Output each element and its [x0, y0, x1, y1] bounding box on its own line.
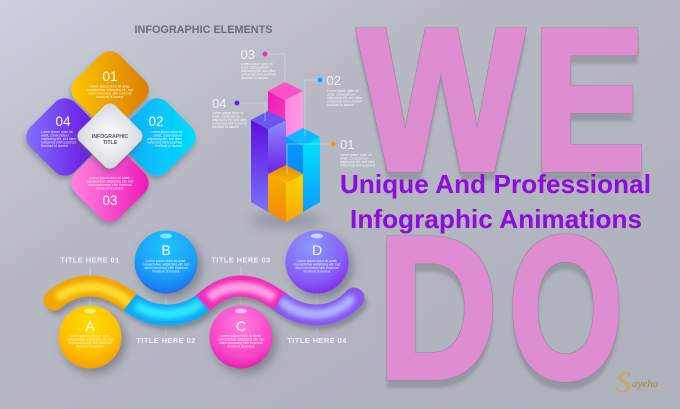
diamond infographic: [20, 45, 202, 228]
callout 04: nonummy nibh euismod: [212, 122, 247, 126]
title labels: TITLE HERE 04: [287, 336, 347, 345]
callout 02: [305, 73, 362, 136]
centre diamond: infographic title: TITLE: [103, 140, 118, 146]
sphere D: D: [312, 242, 322, 258]
sphere A: [58, 306, 122, 368]
subtitle line 1: Unique And Professional: [340, 169, 651, 199]
heading: INFOGRAPHIC ELEMENTS: [134, 24, 272, 36]
sphere B: Lorem ipsum dolor sit amet,: [146, 259, 186, 263]
callout 02: Lorem ipsum dolor sit: [327, 89, 359, 93]
sphere B: B: [161, 242, 171, 258]
callout 01: nonummy nibh euismod: [340, 164, 375, 168]
sphere D: diam nonummy nibh euismod: [295, 266, 339, 270]
callout 03: 03: [240, 47, 255, 62]
callout 02: nonummy nibh euismod: [327, 100, 362, 104]
callout 03: amet, consectetuer: [241, 66, 270, 70]
centre diamond: infographic title: [74, 100, 146, 172]
isometric bar chart: [212, 47, 375, 226]
sphere D: Lorem ipsum dolor sit amet,: [297, 259, 337, 263]
diamond 02: nonummy nibh euismod: [147, 140, 182, 144]
wave timeline: [54, 230, 357, 368]
sphere A: A: [85, 318, 95, 334]
diamond 01: Lorem ipsum dolor sit amet,: [90, 84, 130, 88]
callout 02: adipiscing elit, sed diam: [327, 96, 362, 100]
diamond 01: [65, 45, 155, 135]
diamond 03: [65, 138, 155, 228]
pink segment: [203, 286, 279, 303]
orange bar 01: [268, 165, 303, 222]
callout 03: [240, 47, 285, 84]
large headline WE DO: [358, 0, 646, 409]
purple segment: [279, 298, 354, 315]
diamond 03: consectetuer adipiscing elit, sed: [87, 180, 134, 184]
diamond 01: diam nonummy nibh euismod: [88, 92, 132, 96]
callout 04: 04: [212, 96, 226, 111]
purple subtitle: [340, 169, 651, 234]
centre diamond: infographic title: INFOGRAPHIC: [92, 134, 128, 140]
diamond 04: nonummy nibh euismod: [41, 140, 76, 144]
sphere B: tincidunt ut laoreet: [153, 270, 180, 274]
sphere C: diam nonummy nibh euismod: [219, 341, 263, 345]
diamond 03: Lorem ipsum dolor sit amet,: [90, 176, 130, 180]
diamond 04: tincidunt ut laoreet: [41, 144, 68, 148]
diamond 04: adipiscing elit, sed diam: [41, 137, 76, 141]
diamond 01: 01: [102, 69, 118, 84]
pink bar 03: [268, 82, 303, 138]
diamond 01: consectetuer adipiscing elit, sed: [87, 88, 134, 92]
blue segment: [130, 301, 205, 315]
orange segment: [54, 286, 132, 303]
sphere C: consectetuer adipiscing elit, sed: [218, 338, 265, 342]
sphere B: diam nonummy nibh euismod: [144, 266, 188, 270]
diamond 02: [112, 92, 202, 182]
title labels: TITLE HERE 03: [211, 256, 271, 264]
blue bar 02: [286, 128, 320, 212]
connector lines: [90, 267, 317, 333]
callout 04: adipiscing elit, sed diam: [212, 118, 247, 122]
callout 03: nonummy nibh euismod: [241, 72, 276, 76]
diamond 02: adipiscing elit, sed diam: [147, 137, 182, 141]
callout 04: amet, consectetuer: [212, 114, 241, 118]
diamond 02: 02: [148, 114, 164, 129]
callout 03: tincidunt ut laoreet: [241, 76, 268, 80]
diamond 02: amet, consectetuer: [154, 134, 183, 138]
sphere C: [210, 306, 272, 368]
wave tube shadow: [57, 291, 357, 320]
sphere C: C: [236, 318, 246, 334]
subtitle line 2: Infographic Animations: [350, 204, 642, 234]
diamond 03: 03: [102, 193, 118, 208]
callout 01: [287, 137, 375, 175]
sphere A: diam nonummy nibh euismod: [68, 341, 112, 345]
callout 03: adipiscing elit, sed diam: [241, 69, 276, 73]
callout 01: Lorem ipsum dolor sit: [340, 153, 372, 157]
diamond 04: 04: [55, 114, 71, 129]
signature: ayeha: [632, 378, 659, 390]
callout 01: 01: [340, 137, 354, 152]
diamond 02: Lorem ipsum dolor sit: [150, 130, 182, 134]
callout 04: Lorem ipsum dolor sit: [212, 111, 244, 115]
sphere C: tincidunt ut laoreet: [228, 344, 255, 348]
callout 03: Lorem ipsum dolor sit: [241, 62, 273, 66]
callout 02: 02: [326, 73, 341, 88]
sphere A: tincidunt ut laoreet: [77, 344, 104, 348]
sphere B: consectetuer adipiscing elit, sed: [143, 262, 190, 266]
sphere D: tincidunt ut laoreet: [304, 270, 331, 274]
callout 02: amet, consectetuer: [327, 92, 356, 96]
sphere D: consectetuer adipiscing elit, sed: [294, 262, 341, 266]
callout 02: tincidunt ut laoreet: [327, 103, 354, 107]
title labels: TITLE HERE 01: [60, 256, 120, 264]
sphere A: consectetuer adipiscing elit, sed: [67, 338, 114, 342]
sphere D: [286, 230, 348, 294]
diamond 02: tincidunt ut laoreet: [155, 144, 182, 148]
callout 01: amet, consectetuer: [340, 156, 369, 160]
callout 01: adipiscing elit, sed diam: [340, 160, 375, 164]
diamond 03: diam nonummy nibh euismod: [88, 183, 132, 187]
chart ground shadow: [250, 214, 322, 226]
title labels: [60, 256, 347, 345]
sphere C: Lorem ipsum dolor sit amet,: [221, 334, 261, 338]
callout 04: tincidunt ut laoreet: [212, 125, 239, 129]
diamond 01: tincidunt ut laoreet: [97, 95, 124, 99]
diamond 04: Lorem ipsum dolor sit: [41, 130, 73, 134]
signature: [616, 366, 672, 399]
diamond 04: amet, consectetuer: [41, 134, 70, 138]
signature: S: [616, 366, 631, 399]
title labels: TITLE HERE 02: [136, 336, 196, 345]
sphere B: [134, 230, 198, 294]
diamond 04: [20, 92, 110, 182]
sphere A: Lorem ipsum dolor sit amet,: [70, 334, 110, 338]
purple bar 04: [251, 111, 286, 212]
callout 04: [212, 96, 265, 129]
diamond 03: tincidunt ut laoreet: [97, 186, 124, 190]
